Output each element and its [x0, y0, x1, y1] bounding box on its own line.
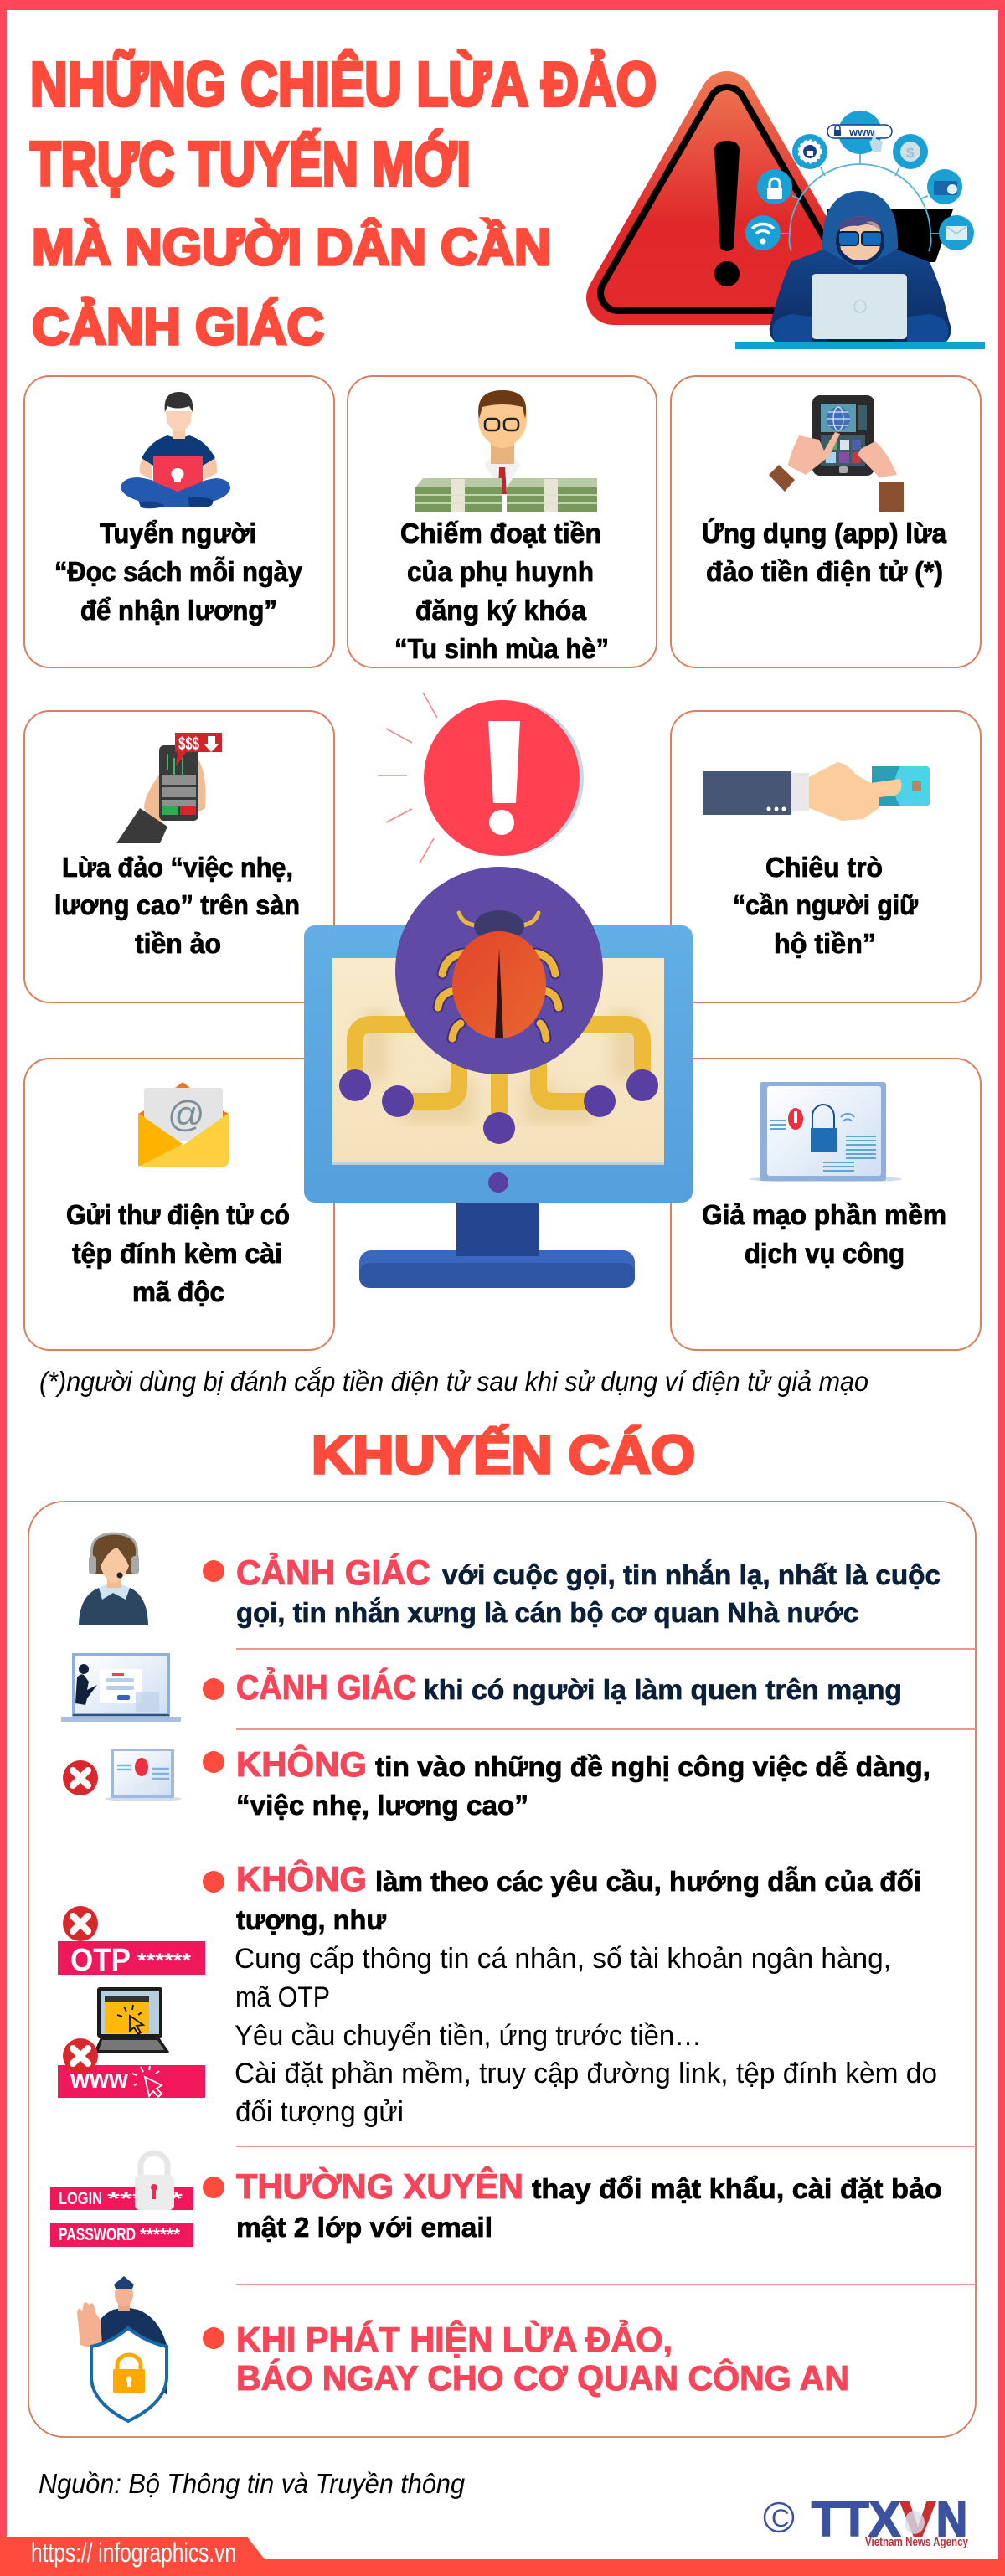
recommendation 4: đối tượng gửi — [235, 2096, 404, 2128]
title: NHỮNG CHIÊU LỪA ĐẢO — [30, 49, 657, 119]
logo: TTXVN: N — [936, 2492, 967, 2547]
card text: “Đọc sách mỗi ngày — [54, 556, 303, 587]
recommendation 3: “việc nhẹ, lương cao” — [236, 1790, 528, 1821]
card text — [66, 1199, 290, 1307]
icon: trading phone: $$$ — [178, 734, 199, 754]
recommendation 3: tin vào những đề nghị công việc dễ dàng, — [375, 1751, 930, 1782]
icon: phone with hands — [769, 395, 904, 512]
title: MÀ NGƯỜI DÂN CẦN — [32, 219, 551, 276]
recommendation 5 — [50, 2153, 942, 2247]
card text: Gửi thư điện tử có — [66, 1199, 290, 1230]
card text: mã độc — [132, 1276, 224, 1307]
panel: recommendations — [28, 1502, 976, 2437]
card text — [733, 852, 918, 959]
card text: tiền ảo — [135, 928, 221, 959]
recommendation 4: tượng, như — [236, 1904, 386, 1935]
icon: login and password: LOGIN — [59, 2189, 102, 2208]
icon: police with shield — [77, 2276, 168, 2421]
panel: tuition scam — [348, 376, 657, 667]
logo: TTXVN: TTX — [812, 2492, 900, 2547]
recommendation 5: thay đổi mật khẩu, cài đặt bảo — [532, 2173, 942, 2204]
card text — [702, 1199, 946, 1269]
icon: OTP bar: ****** — [137, 1950, 192, 1972]
icon: login and password: PASSWORD — [59, 2225, 136, 2244]
icon: www bar: www — [70, 2063, 128, 2094]
recommendation 2 — [61, 1653, 902, 1722]
recommendation 4 — [58, 1858, 937, 2128]
logo: TTXVN — [765, 2492, 969, 2549]
card text — [702, 518, 947, 587]
icon: man with money — [415, 390, 597, 512]
title: TRỰC TUYẾN MỚI — [30, 129, 471, 198]
panel: malware email — [24, 1059, 334, 1350]
recommendation 4: mã OTP — [235, 1981, 330, 2013]
icon: alert circle with rays — [378, 693, 584, 863]
card text: Chiếm đoạt tiền — [400, 518, 601, 549]
card text: Ứng dụng (app) lừa — [702, 518, 947, 549]
logo: TTXVN: C — [771, 2505, 790, 2532]
icon: trading phone — [116, 733, 222, 843]
panel: fake public service software — [671, 1059, 981, 1350]
footnote: (*)người dùng bị đánh cắp tiền điện tử sau khi sử dụng ví điện tử giả mạo — [39, 1366, 868, 1397]
recommendation 2: khi có người lạ làm quen trên mạng — [423, 1674, 902, 1705]
icon: reject and tablet — [63, 1749, 182, 1801]
recommendation 4: Cài đặt phần mềm, truy cập đường link, tệp đính kèm do — [234, 2058, 937, 2089]
recommendation 3 — [63, 1744, 930, 1821]
recommendation 4: Cung cấp thông tin cá nhân, số tài khoản ngân hàng, — [234, 1943, 891, 1975]
recommendation 1: với cuộc gọi, tin nhắn lạ, nhất là cuộc — [442, 1559, 941, 1590]
recommendation 2: CẢNH GIÁC — [236, 1667, 416, 1707]
card text: “cần người giữ — [733, 889, 918, 920]
title: CẢNH GIÁC — [32, 298, 324, 355]
card text: Lừa đảo “việc nhẹ, — [62, 852, 293, 883]
card text: Tuyển người — [100, 518, 256, 549]
card text: Giả mạo phần mềm — [702, 1199, 946, 1230]
recommendation 5: mật 2 lớp với email — [236, 2212, 492, 2243]
title — [30, 49, 657, 355]
card text — [54, 852, 300, 959]
icon: login and password — [50, 2153, 193, 2247]
card text: tệp đính kèm cài — [72, 1238, 282, 1269]
icon: warning triangle with hacker: $ — [906, 145, 915, 161]
panel: crypto app — [671, 376, 981, 667]
card text: Chiêu trò — [765, 852, 883, 883]
logo: TTXVN: Vietnam News Agency — [865, 2535, 969, 2549]
card text: dịch vụ công — [745, 1238, 904, 1269]
card text: của phụ huynh — [407, 556, 594, 587]
card text: đảo tiền điện tử (*) — [706, 556, 943, 587]
icon: login and password: ****** — [107, 2190, 183, 2208]
icon: call operator — [79, 1533, 148, 1625]
source: Nguồn: Bộ Thông tin và Truyền thông — [39, 2468, 466, 2499]
card text: hộ tiền” — [774, 928, 876, 959]
card text: lương cao” trên sàn — [54, 889, 300, 920]
card text — [394, 518, 609, 664]
recommendation 1 — [79, 1533, 941, 1628]
icon: hand with credit card — [703, 762, 930, 821]
panel: keep money scam — [671, 711, 981, 1002]
icon: computer monitor with bug — [304, 867, 693, 1288]
icon: laptop with stranger — [61, 1653, 181, 1722]
heading: khuyến cáo: KHUYẾN CÁO — [312, 1425, 695, 1485]
recommendation 1: gọi, tin nhắn xưng là cán bộ cơ quan Nhà nước — [236, 1597, 858, 1628]
icon: www bar — [58, 2038, 205, 2098]
recommendation 4: KHÔNG — [236, 1858, 367, 1899]
icon: tablet with lock — [750, 1082, 902, 1182]
card text: đăng ký khóa — [415, 595, 587, 626]
recommendation 6: BÁO NGAY CHO CƠ QUAN CÔNG AN — [236, 2357, 849, 2398]
footer band with url: https:// infographics.vn — [31, 2537, 236, 2568]
card text: để nhận lương” — [80, 595, 277, 626]
icon: login and password: ****** — [140, 2226, 180, 2244]
icon: OTP bar — [58, 1906, 205, 1978]
recommendation 6 — [77, 2276, 849, 2421]
recommendation 1: CẢNH GIÁC — [236, 1552, 430, 1592]
logo: TTXVN: V — [900, 2492, 935, 2547]
panel: recruiting readers — [24, 376, 334, 667]
icon: warning triangle with hacker: www — [848, 126, 875, 138]
icon: email envelope: @ — [168, 1094, 205, 1135]
icon: laptop with cursor — [95, 1987, 169, 2053]
recommendation 6: KHI PHÁT HIỆN LỪA ĐẢO, — [236, 2319, 673, 2359]
panel: crypto exchange job scam — [24, 711, 334, 1002]
icon: email envelope — [138, 1082, 229, 1167]
card text: “Tu sinh mùa hè” — [394, 633, 609, 664]
card text — [54, 518, 303, 626]
icon: person with laptop — [121, 392, 230, 508]
recommendation 4: làm theo các yêu cầu, hướng dẫn của đối — [375, 1866, 921, 1897]
icon: warning triangle with hacker — [613, 98, 985, 349]
icon: OTP bar: OTP — [70, 1943, 131, 1978]
recommendation 4: Yêu cầu chuyển tiền, ứng trước tiền… — [234, 2020, 702, 2052]
footer band with url — [0, 2537, 1005, 2576]
recommendation 3: KHÔNG — [236, 1744, 367, 1784]
recommendation 5: THƯỜNG XUYÊN — [236, 2166, 523, 2206]
